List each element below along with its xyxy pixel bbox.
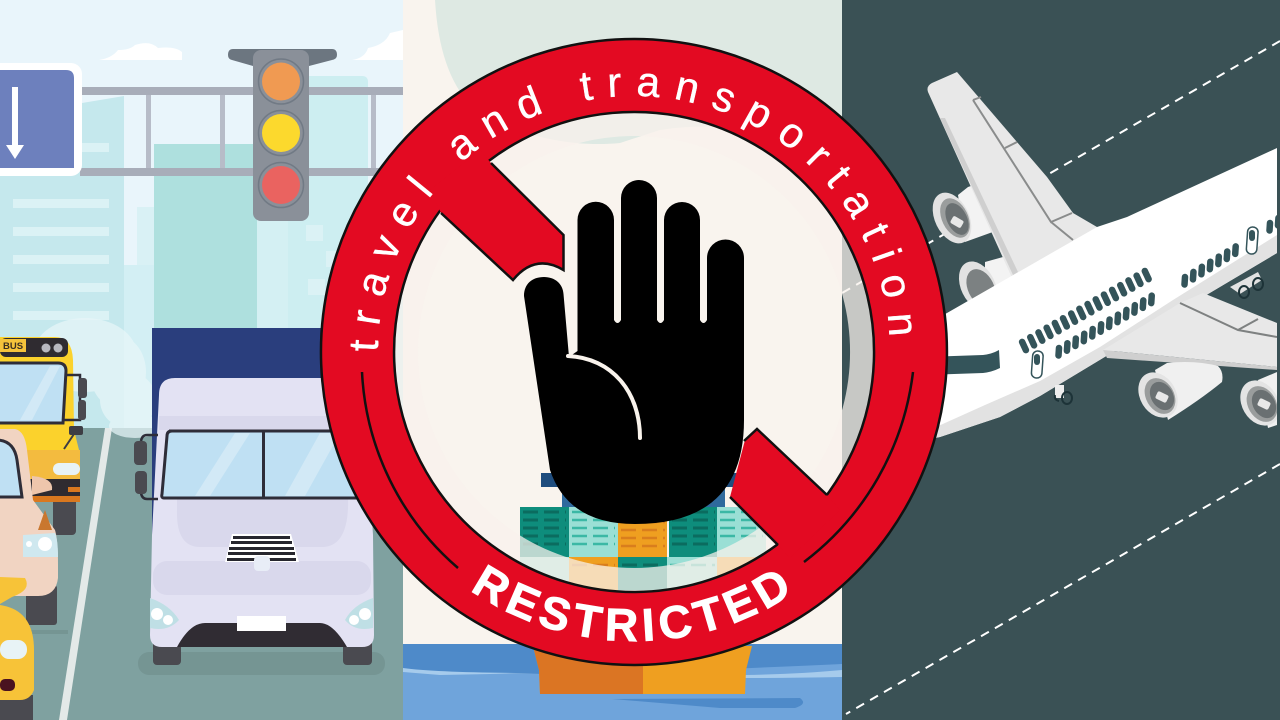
stop hand icon [524, 180, 744, 524]
cheatline [947, 350, 1000, 374]
cargo ship [520, 473, 766, 694]
direction sign [0, 63, 82, 176]
pale hillside [435, 0, 842, 144]
landing gear [1055, 272, 1263, 404]
cabin windows [1022, 218, 1278, 356]
wing engines [1138, 362, 1277, 428]
exhaust smoke [40, 318, 152, 438]
badge ring [321, 39, 947, 665]
front wing [1103, 293, 1277, 370]
runway dashed lines [842, 41, 1280, 714]
truck [134, 328, 385, 675]
inner disc wash [394, 112, 874, 592]
palm crease [568, 356, 640, 438]
water [403, 644, 842, 720]
school bus [0, 337, 87, 535]
road [0, 428, 403, 720]
yellow car [0, 577, 34, 720]
clouds [99, 30, 403, 60]
thin ring arcs [362, 372, 913, 568]
panel: airplane scene [842, 0, 1280, 720]
restricted badge [320, 38, 948, 666]
panel: road traffic scene [0, 0, 403, 720]
rear engines [932, 186, 1012, 302]
fuselage [925, 148, 1277, 440]
prohibition bar: lower right [730, 429, 840, 558]
overhead gantry [80, 87, 403, 176]
panel: cargo ship scene [403, 0, 842, 720]
peach car [0, 429, 68, 634]
cabin doors [1031, 227, 1258, 378]
airplane [925, 72, 1280, 440]
traffic light [228, 49, 337, 221]
ring label: travel and transportation: travel and transportation [350, 72, 912, 351]
school bus: BUS [3, 341, 23, 352]
ring label: RESTRICTED: RESTRICTED [472, 564, 787, 642]
fuselage shade [925, 235, 1277, 440]
prohibition bar: upper left [430, 150, 564, 280]
tail stabilizer [928, 72, 1100, 280]
city buildings [0, 76, 403, 430]
